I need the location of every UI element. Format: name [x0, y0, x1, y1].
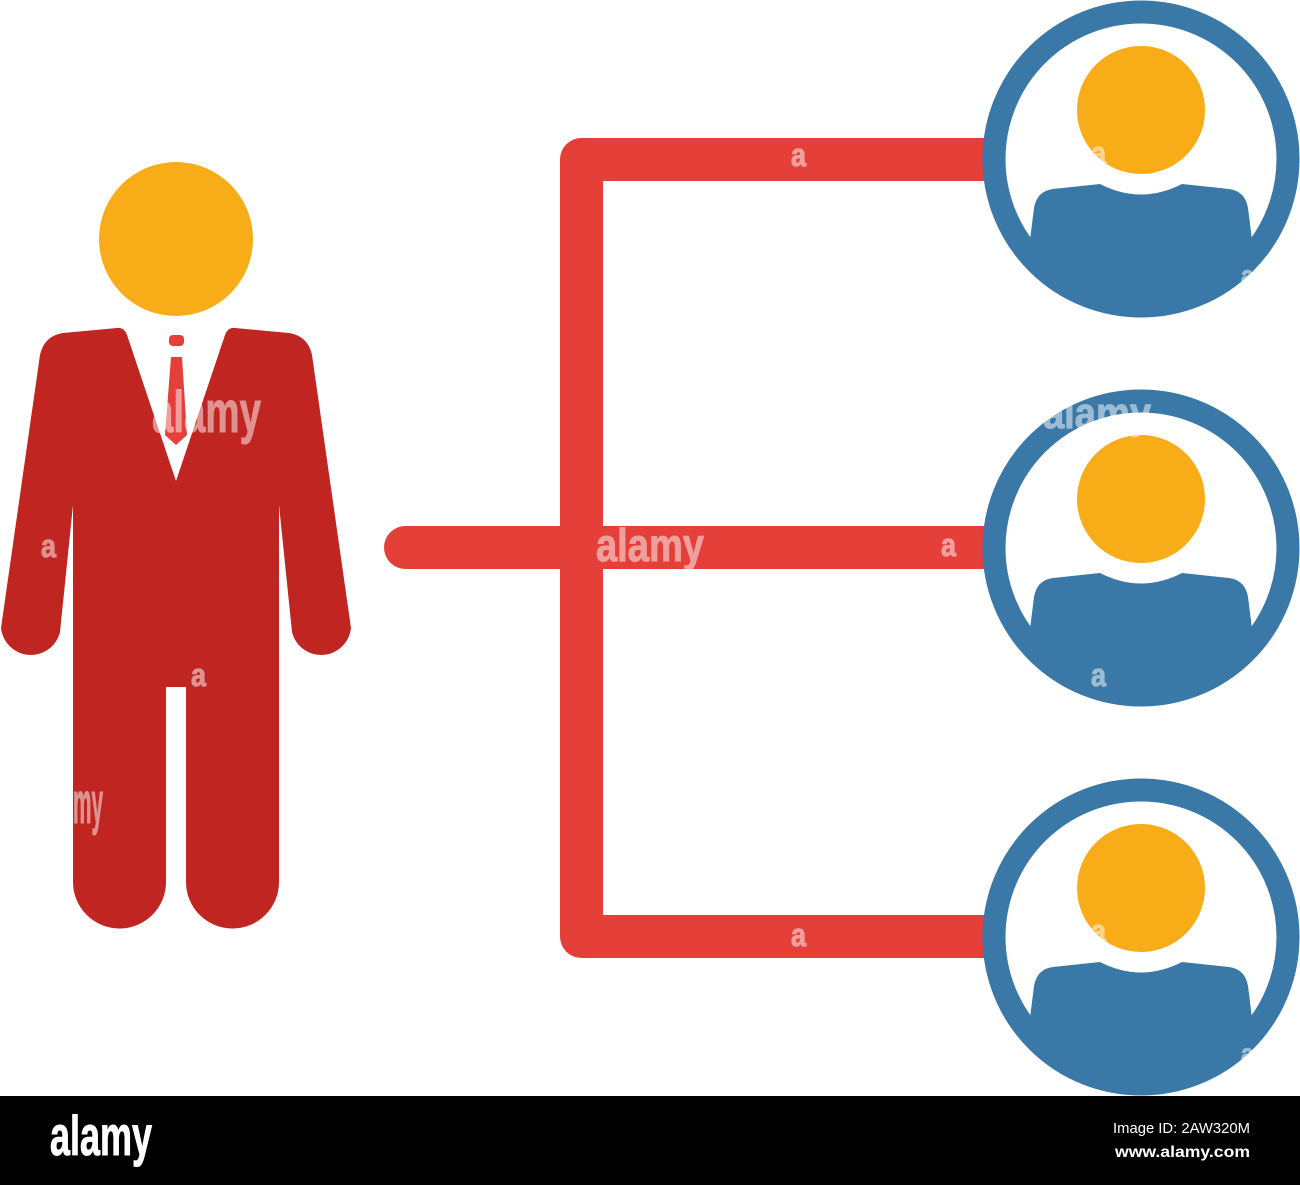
body — [1030, 184, 1252, 296]
body — [1030, 573, 1252, 685]
tie — [165, 357, 187, 445]
watermarks: a — [191, 657, 206, 693]
image id: Image ID: 2AW320M — [1113, 1120, 1250, 1137]
icon: manager figure — [1, 162, 351, 928]
watermarks: alamy — [152, 380, 261, 445]
watermarks: a — [1091, 657, 1106, 693]
head — [1077, 46, 1205, 174]
manager suit — [1, 328, 351, 928]
connector: top, vertical and bottom branch — [582, 160, 990, 936]
watermarks: a — [941, 527, 956, 563]
watermarks: alamy — [1043, 389, 1151, 438]
watermarks: a — [41, 528, 56, 564]
footer logo: alamy — [50, 1104, 152, 1167]
head — [1077, 824, 1205, 952]
connector: hierarchy lines — [406, 160, 990, 936]
website: www.alamy.com — [1114, 1144, 1250, 1161]
watermarks: a — [1091, 913, 1106, 949]
watermarks — [41, 135, 1254, 1069]
watermarks: alamy — [596, 519, 704, 571]
manager head — [99, 162, 253, 316]
head — [1077, 435, 1205, 563]
watermarks: a — [1241, 260, 1254, 291]
tie knot — [169, 335, 184, 346]
connector: middle branch — [406, 526, 990, 569]
watermarks: a — [1241, 1038, 1254, 1069]
watermarks: a — [791, 917, 806, 953]
ring — [994, 790, 1288, 1084]
footer bar — [0, 1096, 1300, 1185]
watermarks: a — [791, 137, 806, 173]
icon: team member top — [994, 12, 1288, 306]
watermarks: a — [1091, 135, 1106, 171]
icon: team member bottom — [994, 790, 1288, 1084]
ring — [994, 12, 1288, 306]
icon: team member middle — [994, 401, 1288, 695]
watermarks: my — [73, 771, 103, 836]
body — [1030, 962, 1252, 1074]
ring — [994, 401, 1288, 695]
